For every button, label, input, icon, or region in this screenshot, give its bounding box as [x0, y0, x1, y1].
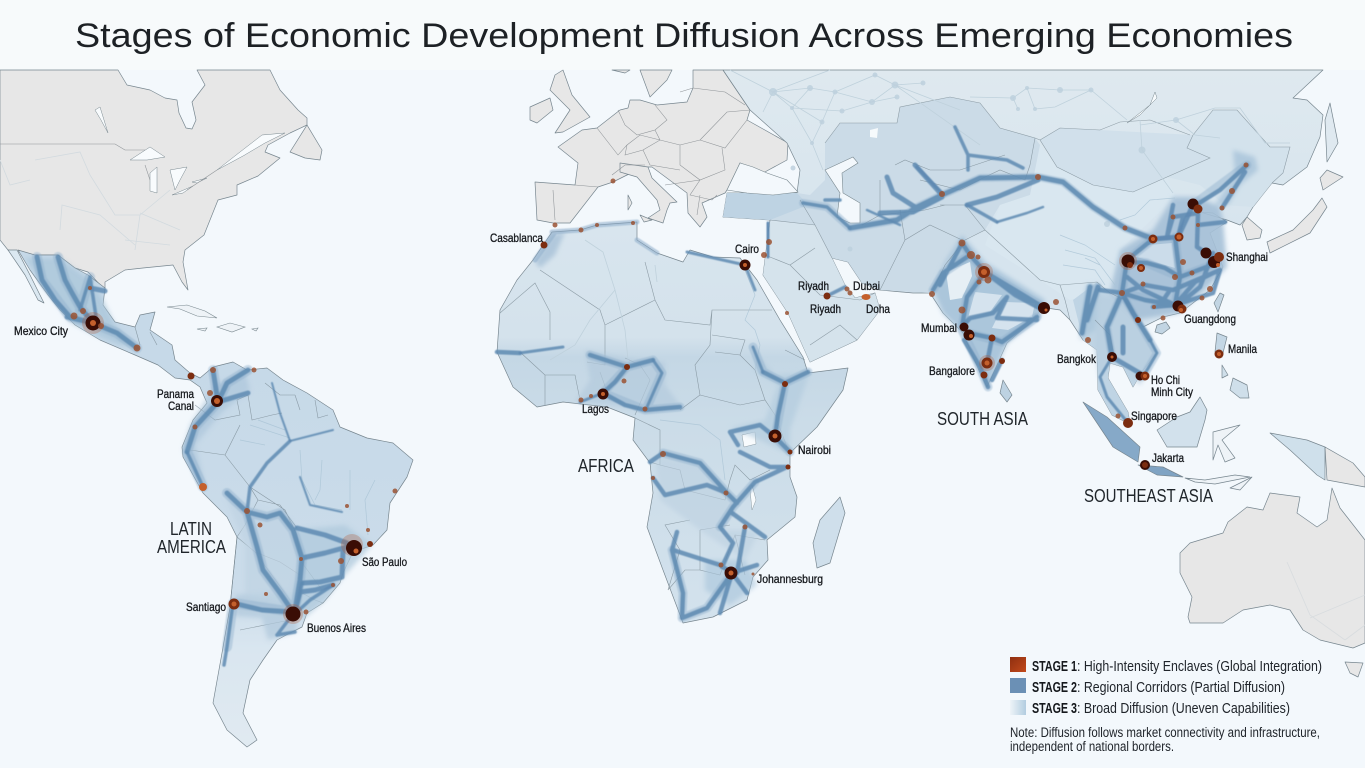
corridors: Central Asia silk road	[768, 127, 1193, 257]
hub: Casablanca and North Africa	[540, 178, 635, 248]
label: Dubai: Dubai	[853, 279, 880, 293]
hubs: Gulf	[785, 286, 870, 315]
zone: stage 3 halos in Latin America	[25, 258, 372, 640]
stage 2 corridors	[37, 127, 1247, 665]
label: Doha: Doha	[866, 302, 890, 316]
land: Caribbean islands	[167, 305, 258, 332]
hub: Buenos Aires	[283, 604, 303, 624]
label: Panama Canal: Panama	[157, 387, 194, 401]
hub: Sao Paulo	[341, 534, 373, 556]
hubs: India	[929, 191, 1059, 378]
label: Ho Chi Minh City: Ho Chi	[1151, 373, 1180, 387]
corridors: Latin America	[37, 257, 347, 665]
region: Latin America	[157, 519, 226, 557]
city labels	[14, 231, 1268, 635]
legend	[1010, 657, 1322, 754]
land: Madagascar	[813, 497, 845, 568]
land: Latin America	[8, 250, 413, 747]
region: Latin America: AMERICA	[157, 537, 226, 557]
legend: note: Note: Diffusion follows market connectivity and infrastructure,	[1010, 725, 1320, 740]
label: Ho Chi Minh City: Minh City	[1151, 385, 1193, 399]
label: Ho Chi Minh City	[1151, 373, 1193, 399]
region labels	[157, 409, 1213, 557]
legend: stage 3	[1010, 700, 1290, 717]
stage 1 hubs	[70, 162, 1248, 624]
label: Mexico City: Mexico City	[14, 324, 68, 338]
label: Singapore: Singapore	[1131, 409, 1177, 423]
corridors: Africa	[497, 222, 808, 618]
label: Jakarta: Jakarta	[1152, 451, 1184, 465]
label: Sao Paulo: São Paulo	[362, 555, 407, 569]
hub: Cairo	[740, 239, 772, 270]
land: Africa	[497, 222, 848, 623]
zone: lighter patches inside India and China	[946, 243, 1175, 330]
hub: Santiago	[228, 598, 240, 610]
label: Casablanca: Casablanca	[490, 231, 543, 245]
legend: stage 1	[1010, 657, 1322, 675]
faint river and network lines across Russia and China	[730, 70, 1290, 285]
title band	[0, 0, 1365, 70]
label: Lagos: Lagos	[582, 402, 609, 416]
hubs: Southeast Asia	[1085, 337, 1224, 470]
hubs: China	[1035, 162, 1248, 323]
legend: note: independent of national borders.	[1010, 739, 1174, 754]
hub: Johannesburg	[718, 562, 754, 580]
label: Panama Canal	[157, 387, 194, 413]
label: Riyadh upper: Riyadh	[798, 279, 829, 293]
hub: Panama Canal	[188, 367, 256, 430]
legend: stage 2	[1010, 678, 1285, 696]
label: Nairobi: Nairobi	[798, 443, 831, 457]
label: Shanghai: Shanghai	[1226, 250, 1268, 264]
corridors: China	[1100, 165, 1247, 320]
zone: Central Asia and Middle East shading	[723, 97, 1290, 424]
label: Santiago: Santiago	[186, 600, 226, 614]
Asia country borders	[765, 97, 1290, 360]
label: Manila: Manila	[1228, 342, 1257, 356]
corridor: Riyadh to Gulf	[827, 287, 845, 296]
zone: stage 3 halos around China and India	[933, 150, 1258, 387]
legend: stage 3: : Broad Diffusion (Uneven Capabilities)	[1077, 701, 1290, 717]
label: Mumbai: Mumbal	[921, 321, 957, 335]
land: Russia and Asia	[723, 70, 1323, 424]
legend: note	[1010, 725, 1320, 754]
title: Stages of Economic Development Diffusion Across Emerging Economies	[75, 17, 1293, 55]
hubs: South America	[199, 483, 398, 614]
zone: stage 3 halos in Africa	[535, 232, 810, 605]
label: Johannesburg: Johannesburg	[757, 572, 823, 586]
legend: stage 1: : High-Intensity Enclaves (Global Integration)	[1077, 659, 1322, 675]
legend: stage 2: : Regional Corridors (Partial Diffusion)	[1077, 680, 1285, 696]
legend: stage 1: STAGE 1	[1032, 659, 1077, 675]
legend: stage 2: STAGE 2	[1032, 680, 1077, 696]
hub: Nairobi	[651, 381, 792, 530]
label: Buenos Aires: Buenos Aires	[307, 621, 366, 635]
land: Japan and Korea	[1242, 103, 1343, 253]
label: Cairo: Cairo	[735, 242, 759, 256]
label: Guangdong: Guangdong	[1184, 312, 1236, 326]
legend: stage 3: STAGE 3	[1032, 701, 1077, 717]
hub: Lagos	[578, 364, 648, 412]
inland seas	[727, 92, 1157, 223]
land: Australia	[1180, 488, 1365, 677]
corridors: India	[933, 243, 1043, 387]
label: Riyadh lower: Riyadh	[810, 302, 841, 316]
corridors: Southeast Asia	[1082, 287, 1157, 423]
land: Asian islands	[1000, 293, 1365, 490]
region: Latin America: LATIN	[170, 519, 212, 539]
label: Panama Canal: Canal	[168, 399, 194, 413]
region: Southeast Asia: SOUTHEAST ASIA	[1084, 486, 1213, 506]
region: Africa: AFRICA	[578, 456, 634, 476]
land: Europe	[530, 70, 788, 227]
label: Bangalore: Bangalore	[929, 364, 975, 378]
land: North America	[0, 70, 322, 290]
label: Bangkok: Bangkok	[1057, 352, 1097, 366]
region: South Asia: SOUTH ASIA	[937, 409, 1028, 429]
hub: Mexico City	[70, 286, 140, 352]
